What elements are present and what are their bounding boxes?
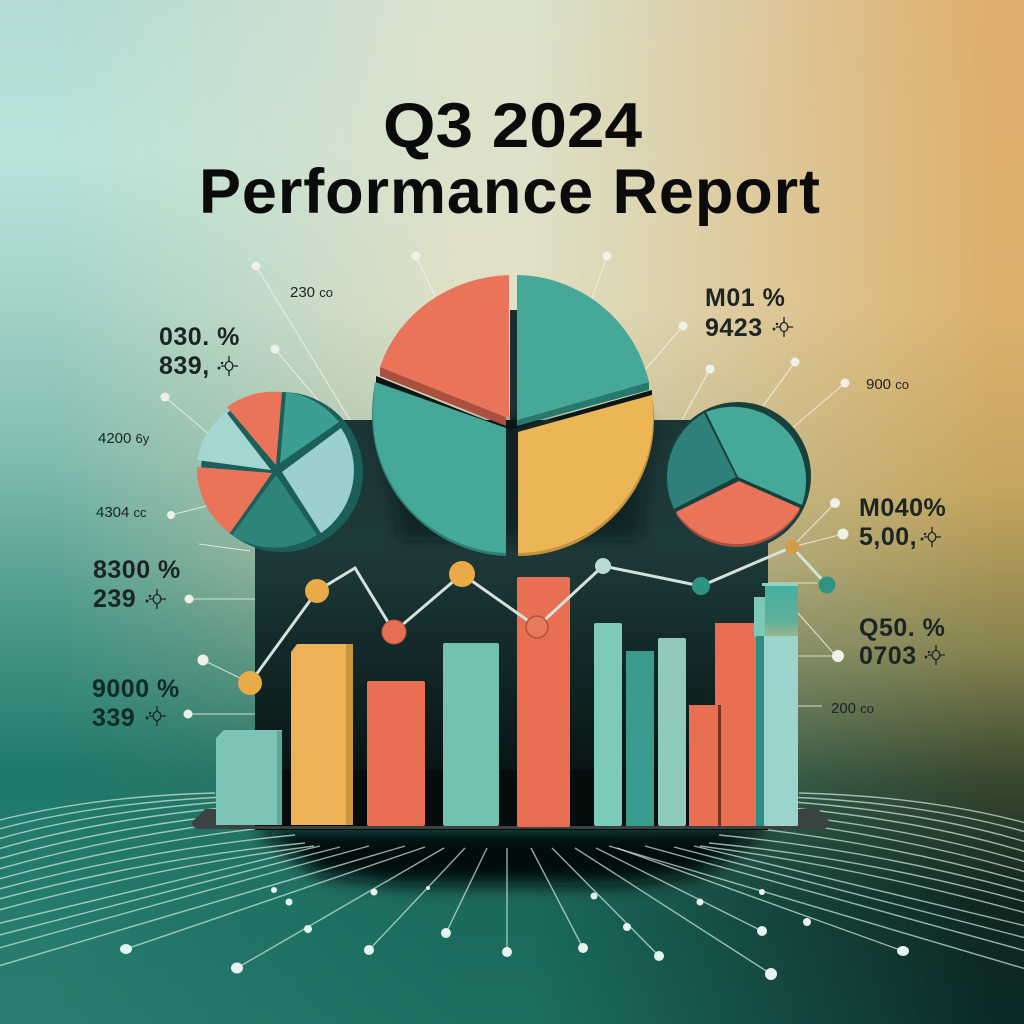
title: Q3 2024: [383, 91, 642, 161]
callout labels: Q50. %: [859, 614, 945, 642]
callout labels: 030. %: [159, 323, 240, 351]
title: [199, 91, 820, 227]
pie chart: small right: [665, 402, 811, 550]
pie chart: large center: [372, 275, 654, 556]
bars backing: [255, 770, 768, 826]
callout labels: 9423: [705, 314, 763, 342]
callout labels: 8300 %: [93, 556, 181, 584]
callout labels: M01 %: [705, 284, 785, 312]
shadow under platform: [255, 828, 768, 885]
callout labels: 4304 cc: [96, 504, 147, 521]
dark backboard panel: [255, 310, 768, 830]
callout labels: 239: [93, 585, 136, 613]
callout labels: 839,: [159, 352, 210, 380]
callout labels: M040%: [859, 494, 946, 522]
callout labels: 9000 %: [92, 675, 180, 703]
floor dots: [120, 886, 909, 980]
callout labels: 230 co: [290, 284, 333, 301]
pie chart: small left: [197, 392, 363, 552]
callout leader lines: [165, 256, 845, 714]
title: Performance Report: [199, 157, 820, 227]
line chart: [238, 540, 836, 695]
callout dots: [160, 252, 850, 718]
callout labels: 4200 6y: [98, 430, 150, 447]
callout labels: 200 co: [831, 700, 874, 717]
callout labels: 0703: [859, 642, 917, 670]
bar chart: [216, 577, 798, 827]
callout labels: 5,00,: [859, 523, 917, 551]
callout labels: [92, 284, 946, 732]
floor radial lines: [0, 793, 1024, 974]
callout labels: 339: [92, 704, 135, 732]
platform: [192, 809, 830, 829]
callout labels: 900 co: [866, 376, 909, 393]
